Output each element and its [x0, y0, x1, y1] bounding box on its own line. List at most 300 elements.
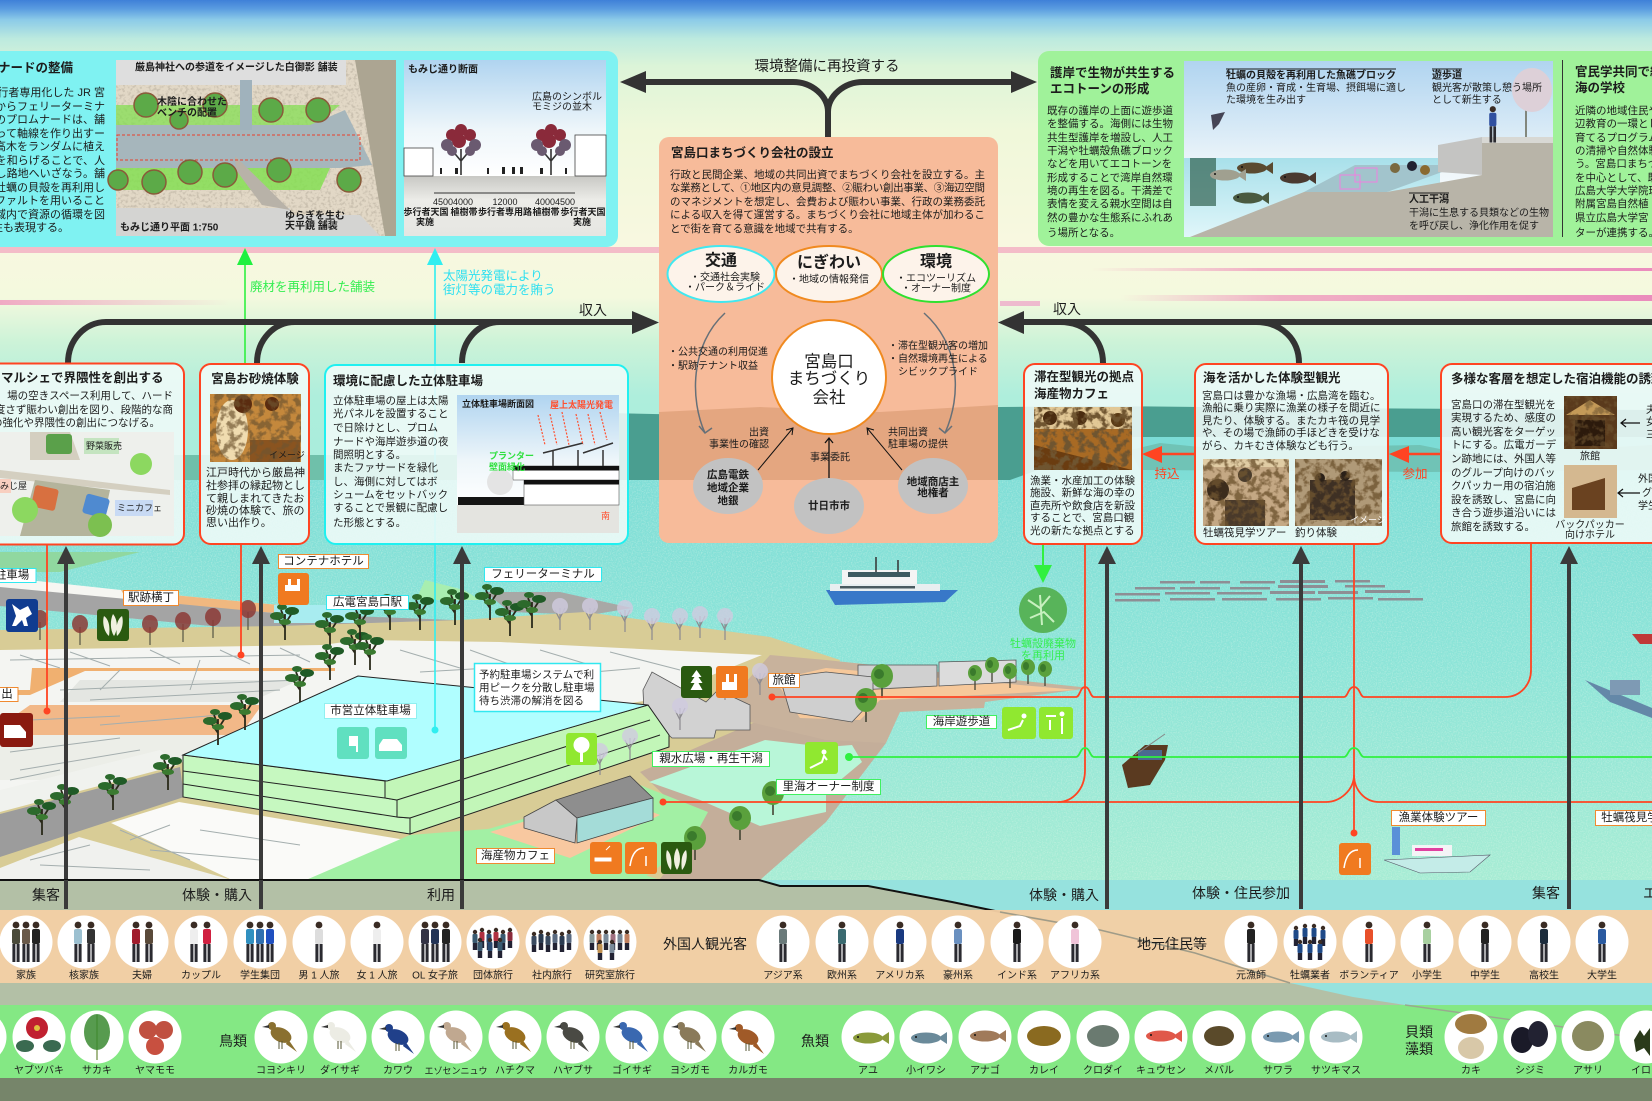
sea grain texture — [0, 480, 1652, 880]
text: benefits right: シビックプライド — [898, 366, 978, 378]
panel: ecotone revetment and sea school — [1038, 51, 1652, 246]
species captions: ヨシガモ — [670, 1064, 710, 1076]
portrait captions: 女 1 人旅 — [356, 968, 398, 982]
species captions: サカキ — [82, 1064, 112, 1076]
note: reservation parking system: 予約駐車場システムで利 — [479, 668, 594, 681]
circle: company — [772, 320, 886, 434]
portrait captions: アフリカ系 — [1050, 970, 1100, 982]
portrait captions: 核家族 — [69, 968, 99, 982]
portrait captions: 欧州系 — [827, 968, 857, 982]
caption: ryokan: 旅館 — [1580, 450, 1600, 462]
text: eco parking: 間照明とする。 — [333, 449, 406, 461]
portrait captions: 研究室旅行 — [585, 968, 635, 982]
arrow: income to company (right) — [998, 311, 1652, 363]
section drawing: 植樹帯 — [532, 206, 560, 217]
card: lodging — [1441, 364, 1652, 543]
portrait captions: アメリカ系 — [875, 970, 925, 982]
species captions: カレイ — [1029, 1064, 1059, 1076]
text: lodging: ン跡地には、外国人等 — [1451, 452, 1556, 465]
revetment section drawing: 人工干潟 — [1409, 192, 1449, 206]
text: seafood cafe: 光の新たな拠点とする — [1030, 524, 1135, 537]
heading: seafood cafe: 滞在型観光の拠点 — [1034, 369, 1135, 384]
revetment section drawing: を呼び戻し、浄化作用を促す — [1409, 218, 1539, 232]
ellipse: environment: ・エコツーリズム — [896, 272, 976, 284]
text: eco parking: た形態とする。 — [333, 516, 406, 529]
text: investment labels: 出資 — [749, 426, 769, 438]
text: sea school description: 附属宮島自然植 — [1575, 197, 1649, 210]
ellipse: transport: ・パーク＆ライド — [685, 282, 765, 294]
circle: company: 宮島口 — [804, 352, 854, 371]
section drawing: 歩行者天国 — [403, 206, 449, 217]
text: company description: 行政と民間企業、地域の共同出資でまちづくり会社を設立する。主 — [670, 168, 985, 181]
section drawing: 4000 — [535, 197, 555, 207]
text: marche: 場の空きスペース利用して、ハード — [7, 389, 173, 402]
distant mountains — [0, 406, 1652, 485]
ground cross-section: sea band — [0, 880, 1652, 1101]
fish — [853, 1025, 1357, 1047]
revetment section drawing: 干潟に生息する貝類などの生物 — [1409, 206, 1549, 218]
ellipse: environment: 環境 — [920, 252, 952, 270]
portrait figures — [12, 922, 1606, 962]
stakeholder: Hatsukaichi city — [794, 478, 864, 534]
marche plan image: 野菜販売 — [86, 440, 122, 451]
marche plan image — [0, 432, 174, 537]
ellipse: environment: ・オーナー制度 — [901, 282, 971, 294]
portrait captions: 団体旅行 — [473, 968, 513, 982]
icon: oyster shell waste ball — [1019, 587, 1067, 633]
plan drawing: 木陰に合わせた — [157, 94, 227, 108]
plan drawing: ベンチの配置 — [157, 106, 217, 118]
text: ecotone description: 共生型護岸を増設し、人工 — [1047, 131, 1173, 144]
species captions: キュウセン — [1136, 1064, 1186, 1076]
portrait captions: アジア系 — [763, 970, 803, 982]
species circles — [0, 1010, 1652, 1064]
text: pottery: 思い出作り。 — [206, 516, 272, 529]
portrait captions: 牡蠣業者 — [1290, 968, 1330, 982]
portrait captions: OL 女子旅 — [412, 968, 458, 982]
text: ecotone description: 然の豊かな生態系にふれあ — [1047, 211, 1173, 224]
text: lodging: トにする。広電ガーデ — [1451, 438, 1557, 451]
text: company description: な業務として、①地区内の意見調整、②賑わい創出事業、③海辺空間 — [670, 181, 985, 194]
map labels: 市営立体駐車場 — [330, 703, 411, 717]
map labels: 海産物カフェ — [481, 848, 550, 862]
band labels: relationship of people to projects: 利用 — [427, 887, 455, 903]
ellipse: liveliness — [776, 246, 882, 302]
text: sea experience: 宮島口は豊かな漁場・広島湾を臨む。 — [1202, 389, 1380, 402]
note: reservation parking system: 用ピークを分散し駐車場 — [479, 681, 595, 694]
heading: foreign tourists: 外国人観光客 — [663, 936, 747, 952]
plan drawing: ゆらぎを生む — [285, 208, 345, 222]
heading: birds: 鳥類 — [219, 1033, 247, 1049]
heading: sea experience: 海を活かした体験型観光 — [1203, 370, 1341, 385]
caption: backpacker hotel: バックパッカー — [1555, 518, 1625, 530]
curved arrows: benefits — [695, 313, 955, 433]
ellipse: environment — [883, 246, 989, 302]
note: reservation parking system — [474, 664, 600, 712]
text: ecotone description: 干潟や牡蠣殻魚礁ブロック — [1047, 144, 1173, 157]
portrait captions: 学生集団 — [240, 968, 280, 982]
species captions: メバル — [1204, 1064, 1234, 1076]
text: seafood cafe: 施設、新鮮な海の幸の — [1030, 486, 1135, 499]
revetment section drawing: 牡蠣の貝殻を再利用した魚礁ブロック — [1226, 68, 1396, 82]
small fishing boat — [1122, 734, 1168, 788]
ellipse: transport — [668, 246, 774, 302]
text: company description: のマネジメントを想定し、会費および賑わい事業、行政の業務委託 — [670, 195, 986, 208]
building: municipal multi-storey car park — [183, 676, 669, 834]
text: eco parking: 立体駐車場の屋上は太陽 — [333, 394, 449, 407]
stakeholder: shop and land owners — [898, 458, 968, 514]
parking section drawing: 壁面緑化 — [489, 461, 525, 472]
text: sea experience: がら、カキむき体験なども行う。 — [1202, 439, 1359, 452]
heading: eco parking: 環境に配慮した立体駐車場 — [333, 373, 484, 388]
text: lodging: 実現するため、感度の — [1451, 411, 1556, 424]
text: benefits right: ・自然環境再生による — [888, 352, 988, 364]
red arrow: bring-in — [1142, 446, 1195, 463]
plan drawing: もみじ通り平面 1:750 — [120, 220, 219, 234]
building: seafood cafe — [524, 776, 653, 843]
section drawing: 歩行者専用路 — [478, 206, 532, 217]
ground outline — [0, 880, 1100, 930]
heading: fish: 魚類 — [801, 1033, 829, 1049]
species captions: カルガモ — [728, 1064, 768, 1076]
label: income left: 収入 — [579, 302, 607, 318]
ellipse: transport: 交通 — [705, 252, 737, 270]
photo: fishing: イメージ — [1350, 515, 1386, 525]
band labels: relationship of people to projects: 体験・購入 — [182, 887, 252, 903]
birds — [262, 1022, 764, 1054]
band labels: relationship of people to projects: 体験・住民参加 — [1192, 885, 1290, 901]
ferry — [826, 557, 958, 605]
text: investment labels: 共同出資 — [888, 426, 928, 438]
section drawing: 歩行者天国 — [560, 206, 606, 217]
species captions: 小イワシ — [906, 1064, 946, 1076]
label: bring-in: 持込 — [1154, 466, 1180, 481]
portrait captions: 男 1 人旅 — [298, 968, 340, 982]
caption: oyster shell recycling: を再利用 — [1021, 649, 1065, 662]
band labels: relationship of people to projects: 体験・購入 — [1029, 887, 1099, 903]
text: lodging: クパッカー用の宿泊施 — [1451, 479, 1556, 492]
buildings: ryokan and promenade houses — [643, 660, 1016, 738]
heading: marche: マルシェで界隈性を創出する — [1, 370, 164, 385]
revetment section drawing: 遊歩道 — [1432, 68, 1462, 82]
map labels — [0, 554, 1652, 864]
plants — [16, 1014, 173, 1060]
text: eco parking: で日除けとし、プロム — [333, 421, 438, 434]
photo: ryokan — [1564, 396, 1617, 449]
text: ecotone description: 境の再生を図る。干満差で — [1047, 184, 1173, 197]
section drawing: 12000 — [492, 197, 518, 207]
text: sea experience: や、その場で漁師の手ほどきを受けな — [1202, 426, 1380, 439]
text: eco parking: シュームをセットバック — [333, 489, 448, 501]
species captions: ダイサギ — [320, 1064, 360, 1076]
portrait captions: 中学生 — [1470, 968, 1500, 982]
text: ecotone description: 既存の護岸の上面に遊歩道 — [1047, 104, 1173, 117]
revetment section drawing: 観光客が散策し憩う場所 — [1432, 80, 1542, 94]
revetment section drawing: 魚の産卵・育成・生育場、摂餌場に適し — [1226, 80, 1406, 94]
stakeholder: regional firms — [693, 458, 763, 514]
caption: raft tour: 牡蠣筏見学ツアー — [1203, 526, 1286, 539]
portrait captions: インド系 — [997, 970, 1037, 982]
map labels: コンテナホテル — [283, 554, 364, 568]
parking section drawing: 立体駐車場断面図 — [462, 398, 534, 409]
band labels: relationship of people to projects — [32, 885, 1652, 903]
species captions: カワウ — [383, 1064, 413, 1076]
card: marche — [0, 364, 184, 544]
stakeholder: regional firms: 広島電鉄 — [707, 468, 749, 481]
heading: company: 宮島口まちづくり会社の設立 — [671, 145, 834, 160]
plan drawing: 天平鏡 舗装 — [285, 218, 338, 232]
section drawing: 実施 — [573, 216, 591, 227]
portrait captions: 豪州系 — [943, 968, 973, 982]
stakeholder: Hatsukaichi city: 廿日市市 — [808, 499, 850, 512]
revetment section drawing: として新生する — [1432, 92, 1502, 106]
text: sea school description: 県立広島大学宮 — [1575, 211, 1648, 224]
species captions: アユ — [858, 1066, 878, 1076]
text: lodging: 高い観光客をターゲッ — [1451, 425, 1556, 438]
band: people — [0, 910, 1652, 983]
heading: ecotone: エコトーンの形成 — [1050, 81, 1150, 96]
revetment section drawing: た環境を生み出す — [1226, 92, 1306, 106]
circle: company: 会社 — [812, 388, 846, 407]
species captions: アサリ — [1573, 1064, 1603, 1076]
text: pottery: て親しまれてきたお — [206, 492, 304, 505]
text: ecotone description: う場所となる。 — [1047, 226, 1120, 239]
photo: fishing — [1295, 459, 1386, 526]
species captions: サワラ — [1263, 1064, 1293, 1076]
text: investment labels: 事業委託 — [810, 450, 850, 464]
text: seafood cafe: 直売所や飲食店を新設 — [1030, 499, 1135, 512]
plan drawing — [108, 60, 396, 236]
line end dots — [44, 652, 1358, 836]
heading: local residents: 地元住民等 — [1137, 936, 1207, 952]
species captions: ハチクマ — [495, 1064, 535, 1076]
text: ecotone description: などを用いてエコトーンを — [1047, 158, 1172, 170]
label: solar power: 街灯等の電力を賄う — [443, 282, 556, 297]
cyan arrow head: solar power — [427, 248, 443, 265]
map labels: 漁業体験ツアー — [1399, 810, 1478, 824]
text: sea experience: 見たり、体験する。またカキ筏の見学 — [1202, 414, 1380, 427]
portrait captions: 家族 — [16, 968, 36, 982]
section drawing — [403, 60, 606, 236]
sea — [0, 437, 1652, 880]
species captions: エゾセンニュウ — [424, 1066, 488, 1076]
species captions: クロダイ — [1083, 1064, 1123, 1076]
card: sea experience — [1195, 364, 1388, 544]
caption: fishing: 釣り体験 — [1295, 526, 1337, 539]
text: pottery: 砂焼の体験で、旅の — [206, 503, 305, 517]
parking section drawing: プランター — [489, 450, 534, 461]
text: benefits right: ・滞在型観光客の増加 — [888, 338, 988, 352]
caption: oyster shell recycling: 牡蠣殻廃棄物 — [1010, 636, 1076, 650]
map labels: フェリーターミナル — [491, 568, 595, 580]
panel: machizukuri company — [659, 137, 998, 543]
label: reinvest: 環境整備に再投資する — [754, 58, 900, 75]
section drawing: 4500 — [433, 197, 453, 207]
map labels: 親水広場・再生干潟 — [659, 751, 763, 765]
species captions: シジミ — [1515, 1066, 1545, 1076]
species captions: アナゴ — [970, 1064, 1000, 1076]
note: reservation parking system: 待ち渋滞の解消を図る — [479, 694, 584, 707]
label: recycled paving: 廃材を再利用した舗装 — [250, 280, 376, 294]
text: eco parking: し、海側に対してはボ — [333, 475, 437, 488]
vertical dark arrows from people to projects — [57, 546, 1578, 909]
arrows: to lodging — [1618, 419, 1640, 497]
circle: company: まちづくり — [788, 369, 870, 388]
text: investment labels: 事業性の確認 — [709, 438, 769, 450]
text: company description: とで街を育てる意識を地域で共有する。 — [670, 222, 859, 235]
text: company description — [670, 168, 986, 235]
text: eco parking: ナードや海岸遊歩道の夜 — [333, 435, 449, 448]
text: lodging: 宮島口の滞在型観光を — [1451, 398, 1556, 411]
islands — [1130, 443, 1652, 472]
red service network lines — [47, 544, 1652, 833]
map labels: 旅館 — [772, 674, 796, 686]
section drawing: 広島のシンボル — [532, 90, 602, 102]
panel: promenade improvement — [0, 51, 618, 247]
species captions: サツキマス — [1311, 1064, 1361, 1076]
photo: backpacker hotel — [1564, 465, 1617, 518]
stakeholder: shop and land owners: 地権者 — [917, 486, 949, 499]
green arrow: shell waste — [1034, 544, 1052, 583]
green line: recycled paving — [244, 262, 246, 363]
marche plan image: ミニカフェ — [117, 503, 162, 513]
text: marche: 度さず賑わい創出を図り、段階的な商 — [0, 403, 173, 416]
portrait captions: 大学生 — [1587, 968, 1617, 982]
green arrow head: recycled paving — [237, 248, 253, 265]
heading: seafood cafe: 海産物カフェ — [1034, 386, 1109, 401]
map labels: 出 — [1, 688, 13, 700]
red arrow: participate — [1389, 446, 1441, 463]
section drawing: モミジの並木 — [532, 100, 592, 112]
plan drawing: 厳島神社への参道をイメージした白御影 舗装 — [135, 60, 338, 74]
stakeholder: regional firms: 地域企業 — [707, 481, 749, 494]
arrow: reinvest in environment — [620, 71, 1037, 137]
band: wildlife — [0, 1005, 1652, 1078]
species captions: ヤブツバキ — [14, 1064, 64, 1076]
text: seafood cafe: することで、宮島口観 — [1030, 511, 1135, 524]
section drawing: 4000 — [453, 197, 473, 207]
ground cross-section: land — [0, 880, 1652, 1101]
portrait captions — [16, 968, 1617, 982]
portrait captions: ボランティア — [1339, 970, 1399, 982]
section drawing: もみじ通り断面 — [408, 62, 478, 76]
text: benefits left: ・駅跡テナント収益 — [668, 358, 758, 372]
portrait captions: 小学生 — [1412, 968, 1442, 982]
text: ecotone description: を整備する。海側には生物 — [1047, 117, 1173, 130]
portrait captions: 元漁師 — [1236, 968, 1266, 982]
text: ecotone description: 形成することで湾岸自然環 — [1047, 171, 1173, 184]
parking section drawing: 屋上太陽光発電 — [550, 399, 613, 410]
map labels: 海岸遊歩道 — [933, 714, 991, 728]
text: lodging: 旅館を誘致する。 — [1451, 520, 1535, 533]
text: pottery: 社参拝の縁起物とし — [206, 478, 305, 492]
green ownership line — [845, 748, 1652, 761]
label: solar power: 太陽光発電により — [443, 268, 543, 283]
heading: promenade: ナードの整備 — [0, 60, 73, 75]
caption: backpacker hotel: 向けホテル — [1565, 528, 1615, 540]
stakeholder: regional firms: 地銀 — [718, 494, 739, 507]
card: eco parking — [325, 365, 628, 544]
ellipse: transport: ・交通社会実験 — [690, 270, 760, 284]
card: sunayaki pottery — [200, 364, 309, 544]
section drawing: 実施 — [416, 216, 434, 227]
oyster rafts — [1115, 580, 1423, 602]
portrait captions: カップル — [181, 970, 221, 982]
arrow stubs in ground band — [64, 880, 1571, 909]
map labels: 里海オーナー制度 — [782, 779, 875, 793]
text: pottery: 江戸時代から厳島神 — [206, 465, 305, 479]
photo: raft tour — [1203, 459, 1289, 526]
text: eco parking: 光パネルを設置すること — [333, 407, 448, 420]
species captions: ハヤブサ — [553, 1064, 593, 1076]
text: lodging: き合う遊歩道沿いには — [1451, 506, 1556, 519]
text: eco parking: することで景観に配慮し — [333, 501, 448, 514]
text: benefits left: ・公共交通の利用促進 — [668, 344, 768, 358]
marche plan image: みじ屋 — [0, 481, 27, 491]
photo: seafood cafe — [1034, 407, 1132, 470]
photo: pottery — [210, 394, 305, 462]
map labels: 駅跡横丁 — [128, 590, 174, 604]
waterfront scene (land, map and paths) — [0, 552, 1090, 880]
species captions — [14, 1064, 1652, 1076]
species captions: ヤマモモ — [135, 1066, 175, 1076]
text: company description: による収入を得て運営する。まちづくり会社に地域主体が加わるこ — [670, 208, 985, 221]
fishing tour boat — [1384, 827, 1490, 873]
navy ships at right edge — [1585, 634, 1652, 718]
text: sea experience: 漁船に乗り実際に漁業の様子を間近に — [1202, 401, 1380, 414]
activity icons on map — [0, 573, 1371, 875]
text: lodging: のグループ向けのバッ — [1451, 466, 1555, 479]
text: investment labels — [709, 426, 948, 464]
band labels: relationship of people to projects: 集客 — [32, 887, 60, 903]
arrows: stakeholders to company — [758, 428, 902, 483]
ellipse: liveliness: にぎわい — [797, 252, 861, 272]
cyan line: solar power — [432, 262, 438, 734]
shellfish and seaweed — [1455, 1014, 1650, 1059]
section drawing: 植樹帯 — [450, 206, 478, 217]
divider — [1562, 60, 1563, 237]
species captions: ゴイサギ — [612, 1064, 652, 1076]
card: seafood cafe — [1024, 364, 1142, 544]
ellipse: liveliness: ・地域の情報発信 — [789, 272, 869, 286]
arrow: income to company (left) — [68, 311, 659, 363]
revetment section drawing — [1184, 61, 1553, 237]
heading: shellfish and seaweed: 貝類 — [1405, 1024, 1433, 1040]
heading: shellfish and seaweed: 藻類 — [1405, 1041, 1433, 1057]
heading: ecotone: 護岸で生物が共生する — [1050, 65, 1175, 80]
species captions: コヨシキリ — [256, 1066, 306, 1076]
section drawing: 4500 — [555, 197, 575, 207]
portrait captions: 社内旅行 — [532, 968, 572, 982]
text: investment labels: 駐車場の提供 — [888, 438, 948, 450]
parking section drawing: 南 — [601, 510, 610, 521]
portrait captions: 夫婦 — [132, 968, 152, 982]
map labels: 広電宮島口駅 — [333, 594, 402, 608]
portrait captions: 高校生 — [1529, 968, 1559, 982]
portraits row — [0, 916, 1628, 968]
species captions: カキ — [1461, 1064, 1481, 1076]
heading: sea school: 海の学校 — [1575, 80, 1626, 95]
label: participate: 参加 — [1402, 467, 1428, 481]
photo: pottery: イメージ — [269, 450, 305, 460]
text: eco parking: またファサードを緑化 — [333, 461, 438, 474]
text: ecotone description: 表情を変える親水空間は自 — [1047, 197, 1173, 210]
label: income right: 収入 — [1053, 301, 1081, 317]
stakeholder: shop and land owners: 地域商店主 — [907, 475, 959, 488]
parking section drawing — [457, 395, 619, 533]
bottom ground strip — [0, 1078, 1652, 1101]
band labels: relationship of people to projects: 集客 — [1532, 885, 1560, 901]
